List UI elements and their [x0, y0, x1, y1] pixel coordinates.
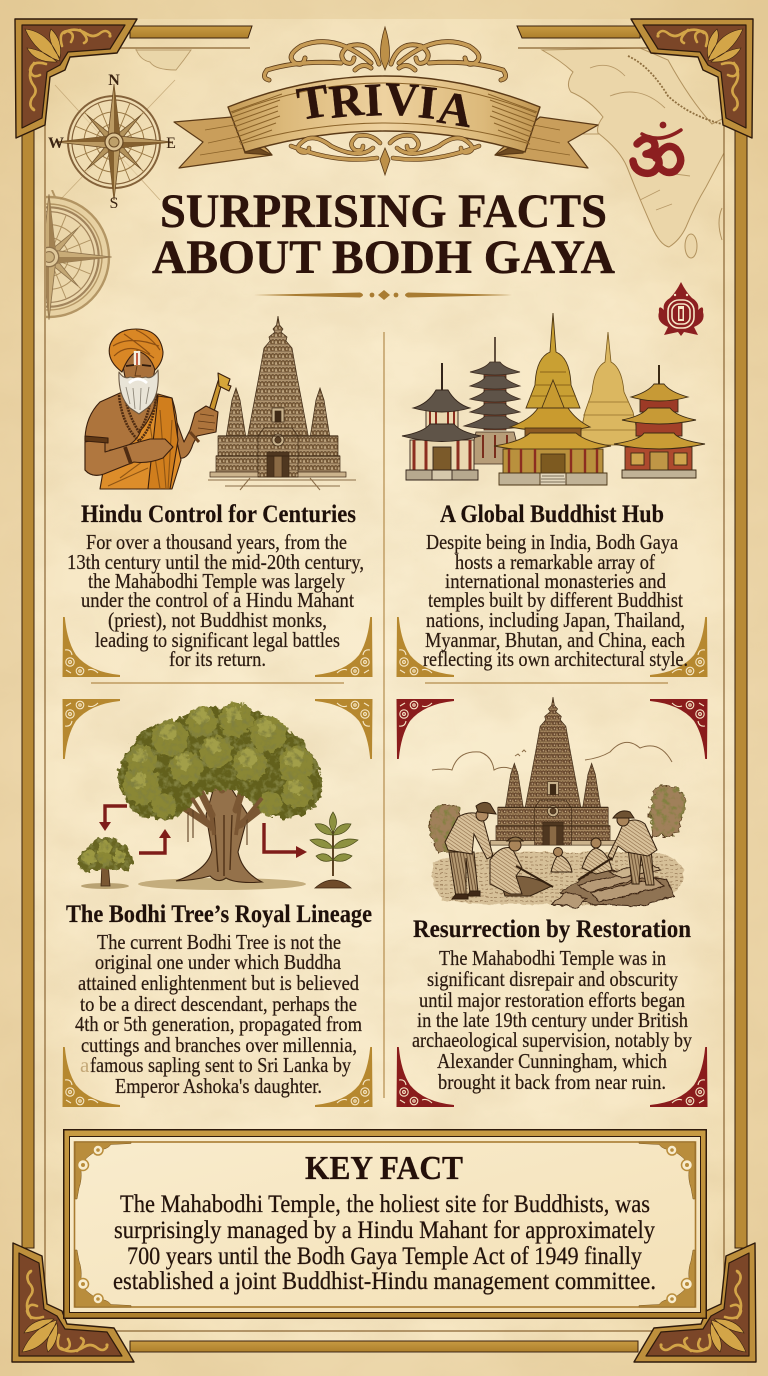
title word: TRIVIA — [294, 73, 476, 138]
key fact text — [113, 1191, 656, 1295]
arrow: to sapling — [264, 823, 307, 858]
body text: restoration: The Mahabodhi Temple was in — [439, 946, 666, 970]
key fact box — [63, 1129, 707, 1319]
panel dividers — [91, 332, 668, 1098]
beads — [119, 392, 156, 441]
forearm — [85, 438, 173, 475]
arrows: lineage cycle — [99, 806, 307, 858]
flourish below banner — [291, 135, 479, 175]
map of India — [542, 48, 724, 258]
body text: Bodhi tree: a — [80, 1053, 90, 1077]
body text: Hindu control — [67, 530, 364, 671]
illustration: standing archaeologist — [445, 802, 505, 899]
body text: global hub: Myanmar, Bhutan, and China, each — [425, 628, 685, 652]
illustration: Hindu mahant with key — [85, 329, 231, 489]
body text: Bodhi tree: The current Bodhi Tree is not the — [97, 930, 341, 954]
ornament: panel 1 bottom corners — [62, 617, 372, 677]
body text: Hindu control: for its return. — [169, 647, 266, 671]
main title: SURPRISING FACTS — [160, 185, 607, 238]
corner ornament: bottom right — [634, 1243, 756, 1362]
ribbon edge lines — [231, 83, 537, 144]
body text: Hindu control: For over a thousand years, from the — [86, 530, 347, 554]
corner ornament: top right — [631, 19, 753, 138]
arrow: up to big tree — [139, 829, 171, 853]
illustration: temple under restoration — [490, 697, 616, 845]
body text: restoration: until major restoration efforts began — [419, 988, 685, 1012]
title divider — [254, 290, 512, 300]
ribbon band — [228, 76, 540, 152]
body text: restoration: Alexander Cunningham, which — [437, 1049, 667, 1073]
body text: Hindu control: leading to significant legal battles — [95, 628, 340, 652]
flourish above banner — [264, 27, 506, 80]
key fact text: established a joint Buddhist-Hindu management committee. — [113, 1268, 656, 1295]
body text: restoration: in the late 19th century under British — [417, 1008, 688, 1032]
compass rose with letters: E — [166, 135, 176, 152]
illustration: left pagoda — [402, 363, 481, 480]
illustration: man with pick — [578, 811, 657, 885]
illustration: central golden temple — [494, 313, 611, 485]
body text: Bodhi tree: Emperor Ashoka's daughter. — [115, 1074, 322, 1098]
heading: The Bodhi Tree's Royal Lineage: The Bodhi Tree’s Royal Lineage — [66, 901, 372, 928]
body text: global hub: temples built by different Buddhist — [428, 588, 683, 612]
body text: Bodhi tree: cuttings and branches over millennia, — [81, 1033, 357, 1057]
illustration: sapling — [310, 812, 358, 888]
illustration: smaller descendant tree — [78, 837, 132, 889]
ornament: panel 2 bottom corners — [396, 617, 708, 677]
body text: Hindu control: the Mahabodhi Temple was largely — [88, 569, 345, 593]
om symbol — [633, 123, 681, 173]
raised arm — [174, 406, 218, 458]
ornament: panel 3 bottom corners — [62, 1047, 372, 1107]
illustration: temple — [208, 316, 356, 490]
panel: Hindu control — [85, 316, 356, 490]
body text: restoration: significant disrepair and obscurity — [427, 967, 678, 991]
body text: Bodhi tree: 4th or 5th generation, propagated from — [75, 1012, 362, 1036]
panel: Global Buddhist hub — [402, 313, 705, 485]
key fact text: 700 years until the Bodh Gaya Temple Act of 1949 finally — [127, 1243, 642, 1270]
panel: Bodhi tree — [62, 699, 372, 890]
body text: Bodhi tree: to be a direct descendant, perhaps the — [80, 992, 357, 1016]
illustration: clouds and foliage — [430, 742, 684, 852]
compass rose with letters: S — [110, 195, 118, 212]
secondary compass, partly hidden — [0, 190, 112, 320]
body text: Hindu control: (priest), not Buddhist monks, — [108, 608, 327, 632]
illustration: ground — [432, 851, 684, 905]
body text: global hub: reflecting its own architectural style. — [423, 647, 688, 671]
corner ornament: bottom left — [12, 1243, 134, 1362]
compass rose with letters: N — [108, 72, 120, 89]
body text: Bodhi tree: attained enlightenment but is believed — [78, 971, 359, 995]
illustration: crouching workers — [490, 837, 612, 896]
robe — [100, 394, 181, 489]
key fact text: The Mahabodhi Temple, the holiest site for Buddhists, was — [120, 1191, 650, 1218]
body text: Bodhi tree: famous sapling sent to Sri Lanka by — [90, 1053, 351, 1077]
illustration: right pagoda — [614, 365, 705, 478]
body text: restoration — [412, 946, 692, 1094]
body text: Bodhi tree: original one under which Buddha — [95, 950, 342, 974]
turban — [109, 329, 163, 372]
arrow: to small tree — [99, 806, 127, 831]
body text: global hub: Despite being in India, Bodh Gaya — [426, 530, 679, 554]
illustration: back gold stupa — [578, 332, 640, 445]
illustration: great Bodhi tree — [118, 703, 322, 890]
heading: A Global Buddhist Hub: A Global Buddhist Hub — [440, 501, 664, 528]
main title: ABOUT BODH GAYA — [152, 231, 615, 284]
ribbon tails — [174, 117, 598, 168]
illustration: rubble stones — [552, 864, 674, 908]
body text: Hindu control: under the control of a Hindu Mahant — [81, 588, 354, 612]
ornament: panel 4 bottom corners — [396, 1047, 708, 1107]
body text: restoration: archaeological supervision, notably by — [412, 1028, 692, 1052]
heading: Resurrection by Restoration: Resurrection by Restoration — [413, 916, 691, 943]
lotus emblem — [658, 282, 704, 336]
body text: global hub: international monasteries and — [445, 569, 666, 593]
key fact frame — [63, 1129, 707, 1319]
face marks — [134, 351, 140, 365]
panel: Resurrection by restoration — [396, 697, 708, 908]
body text: restoration: brought it back from near ruin. — [438, 1070, 666, 1094]
compass rose with letters: W — [48, 135, 64, 152]
main title — [152, 185, 615, 284]
body text: global hub — [423, 530, 688, 671]
body text: global hub: hosts a remarkable array of — [455, 550, 655, 574]
corner ornament: top left — [15, 19, 137, 138]
body text: Hindu control: 13th century until the mid-20th century, — [67, 550, 364, 574]
key fact text: surprisingly managed by a Hindu Mahant for approximately — [114, 1217, 655, 1244]
heading: Hindu Control for Centuries: Hindu Control for Centuries — [81, 501, 356, 528]
body text: Bodhi tree — [75, 930, 362, 1098]
key — [209, 373, 231, 412]
ornament: panel 3 top corners — [62, 699, 372, 759]
ornament: panel 4 top corners — [396, 699, 708, 759]
head — [122, 352, 156, 395]
banner with title TRIVIA — [174, 27, 598, 175]
body text: global hub: nations, including Japan, Thailand, — [426, 608, 685, 632]
key fact corner scrolls — [75, 1142, 695, 1307]
upper body skin — [85, 391, 165, 475]
faint map on left — [136, 49, 191, 70]
key fact heading: KEY FACT — [305, 1150, 463, 1187]
compass rose with letters — [48, 72, 176, 212]
illustration: five-tier pagoda — [464, 337, 526, 464]
